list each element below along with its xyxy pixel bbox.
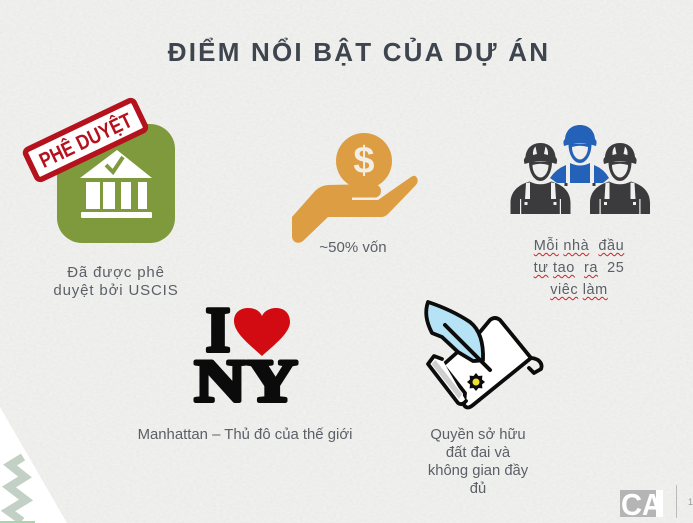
icon: hand holding dollar coin: $ — [353, 140, 375, 182]
worker: right — [590, 143, 650, 214]
text: approved by USCIS: Đã được phê duyệt bởi USCIS — [53, 264, 179, 299]
icon: I love NY logo — [194, 295, 298, 414]
corner decoration: white triangle with green zigzag — [0, 407, 67, 523]
icon: I love NY logo: NY — [194, 348, 298, 414]
icon: hand holding dollar coin — [292, 133, 418, 243]
stamp: PHÊ DUYỆT: PHÊ DUYỆT — [35, 108, 136, 173]
text: 25 jobs per investor: Mỗi nhà đầu tư tao ra 25 viêc làm — [534, 238, 624, 298]
icon: I love NY logo: I — [206, 295, 230, 365]
text: about 50 percent capital: ~50% vốn — [319, 239, 387, 256]
CA logo and page number: A — [642, 487, 662, 522]
icon: scroll and quill — [426, 302, 542, 408]
CA logo and page number: 1 — [688, 497, 693, 507]
icon: three construction workers — [510, 125, 650, 214]
text: Manhattan capital of the world: Manhattan – Thủ đô của thế giới — [138, 427, 352, 443]
text: full land and air rights: Quyền sở hữu đất đai và không gian đầy đủ — [428, 427, 528, 497]
worker: centre blue — [550, 125, 609, 186]
heart — [234, 308, 290, 356]
icon: green bank tile with check mark — [57, 124, 175, 243]
CA logo and page number: C — [621, 487, 642, 522]
CA logo and page number — [620, 485, 693, 522]
worker: left — [510, 143, 570, 214]
title: ĐIỂM NỔI BẬT CỦA DỰ ÁN — [168, 37, 550, 67]
